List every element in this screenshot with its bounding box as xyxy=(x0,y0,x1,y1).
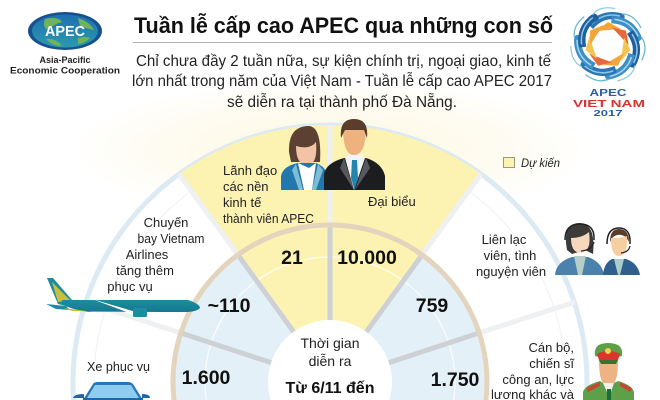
label: Vietnam Airlines flights xyxy=(107,215,204,294)
label: liaison volunteers xyxy=(476,232,546,279)
legend: planned xyxy=(504,156,560,170)
label: Vietnam Airlines flights: tăng thêm xyxy=(116,263,174,278)
centre: duration: diễn ra xyxy=(309,353,352,369)
label: liaison volunteers: viên, tình xyxy=(484,248,536,263)
icon: police officer xyxy=(583,343,634,400)
values: ~110 xyxy=(208,295,251,317)
labels: top sectors: kinh tế xyxy=(223,195,262,210)
labels: top sectors xyxy=(223,163,416,226)
label: liaison volunteers: nguyện viên xyxy=(476,264,546,279)
labels: top sectors: thành viên APEC xyxy=(223,211,314,226)
title rule xyxy=(133,42,552,44)
centre: duration: Từ 6/11 đến xyxy=(286,380,374,397)
labels: top sectors: các nền xyxy=(223,179,269,194)
values: 1.600 xyxy=(182,367,231,389)
icon: woman leader xyxy=(281,126,326,190)
icon: car xyxy=(73,382,150,400)
label: police officers: chiến sĩ xyxy=(529,356,575,371)
legend: planned: Dự kiến xyxy=(521,156,560,170)
logo: APEC: Asia-Pacific xyxy=(39,55,91,65)
label: police officers xyxy=(491,340,575,400)
centre: duration xyxy=(286,335,374,397)
values: 10.000 xyxy=(337,247,397,269)
logo: APEC: APEC xyxy=(45,23,85,40)
values: 21 xyxy=(281,247,303,269)
logo: APEC Viet Nam 2017: 2017 xyxy=(594,108,623,118)
values xyxy=(182,247,480,391)
logo: APEC: Economic Cooperation xyxy=(10,66,120,76)
intro text: lớn nhất trong năm của Việt Nam - Tuần lễ cấp cao APEC 2017 xyxy=(132,71,552,90)
icon: male delegate xyxy=(324,119,385,190)
label: police officers: công an, lực xyxy=(502,372,574,387)
label: liaison volunteers: Liên lạc xyxy=(482,232,527,247)
intro text: sẽ diễn ra tại thành phố Đà Nẵng. xyxy=(227,92,457,111)
label: police officers: Cán bộ, xyxy=(528,340,574,355)
label: Vietnam Airlines flights: Airlines xyxy=(126,247,169,262)
label: Vietnam Airlines flights: Chuyến xyxy=(144,215,188,230)
logo: APEC Viet Nam 2017 xyxy=(564,0,654,118)
values: 1.750 xyxy=(431,369,480,391)
label: Vietnam Airlines flights: phục vụ xyxy=(107,279,153,294)
yellow sector: planned xyxy=(179,125,481,252)
intro text: Chỉ chưa đầy 2 tuần nữa, sự kiện chính trị, ngoại giao, kinh tế xyxy=(136,53,551,70)
logo: APEC Viet Nam 2017: APEC xyxy=(590,88,626,99)
icon: call-centre staff xyxy=(555,223,640,275)
logo: APEC Viet Nam 2017: VIET NAM xyxy=(573,98,645,110)
icon: airplane xyxy=(46,278,200,317)
label: service cars: Xe phục vụ xyxy=(87,359,150,374)
title: Tuần lễ cấp cao APEC qua những con số xyxy=(134,13,553,38)
centre: duration: Thời gian xyxy=(300,335,360,351)
label: Vietnam Airlines flights: bay Vietnam xyxy=(138,231,204,246)
intro text xyxy=(132,53,552,111)
radial chart xyxy=(73,125,587,400)
values: 759 xyxy=(416,295,448,317)
labels: top sectors: Lãnh đạo xyxy=(223,163,277,178)
logo: APEC xyxy=(10,12,120,76)
labels: top sectors: Đại biểu xyxy=(368,194,416,209)
